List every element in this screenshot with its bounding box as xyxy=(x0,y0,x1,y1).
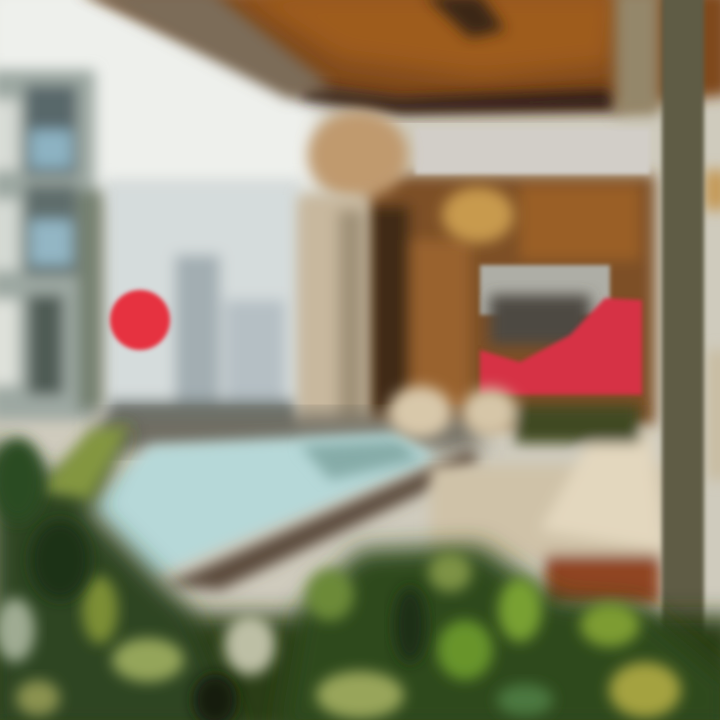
ceiling xyxy=(80,0,720,114)
pool xyxy=(90,432,440,578)
right edge wall xyxy=(704,170,720,480)
terrace lower wall xyxy=(100,415,480,450)
cushions and loungers xyxy=(388,386,665,605)
wood wall xyxy=(365,175,655,425)
hanging lamp right xyxy=(442,187,514,243)
pool edge xyxy=(165,450,480,590)
hanging lamp left xyxy=(308,111,408,199)
column xyxy=(298,195,368,430)
left building xyxy=(0,70,102,420)
white horizontal band xyxy=(415,128,650,174)
red sign xyxy=(480,265,642,395)
foliage xyxy=(0,425,720,720)
distant pale building xyxy=(104,180,302,440)
red circle marker xyxy=(110,290,170,350)
upper right column xyxy=(615,0,660,115)
vertical post xyxy=(662,0,704,640)
